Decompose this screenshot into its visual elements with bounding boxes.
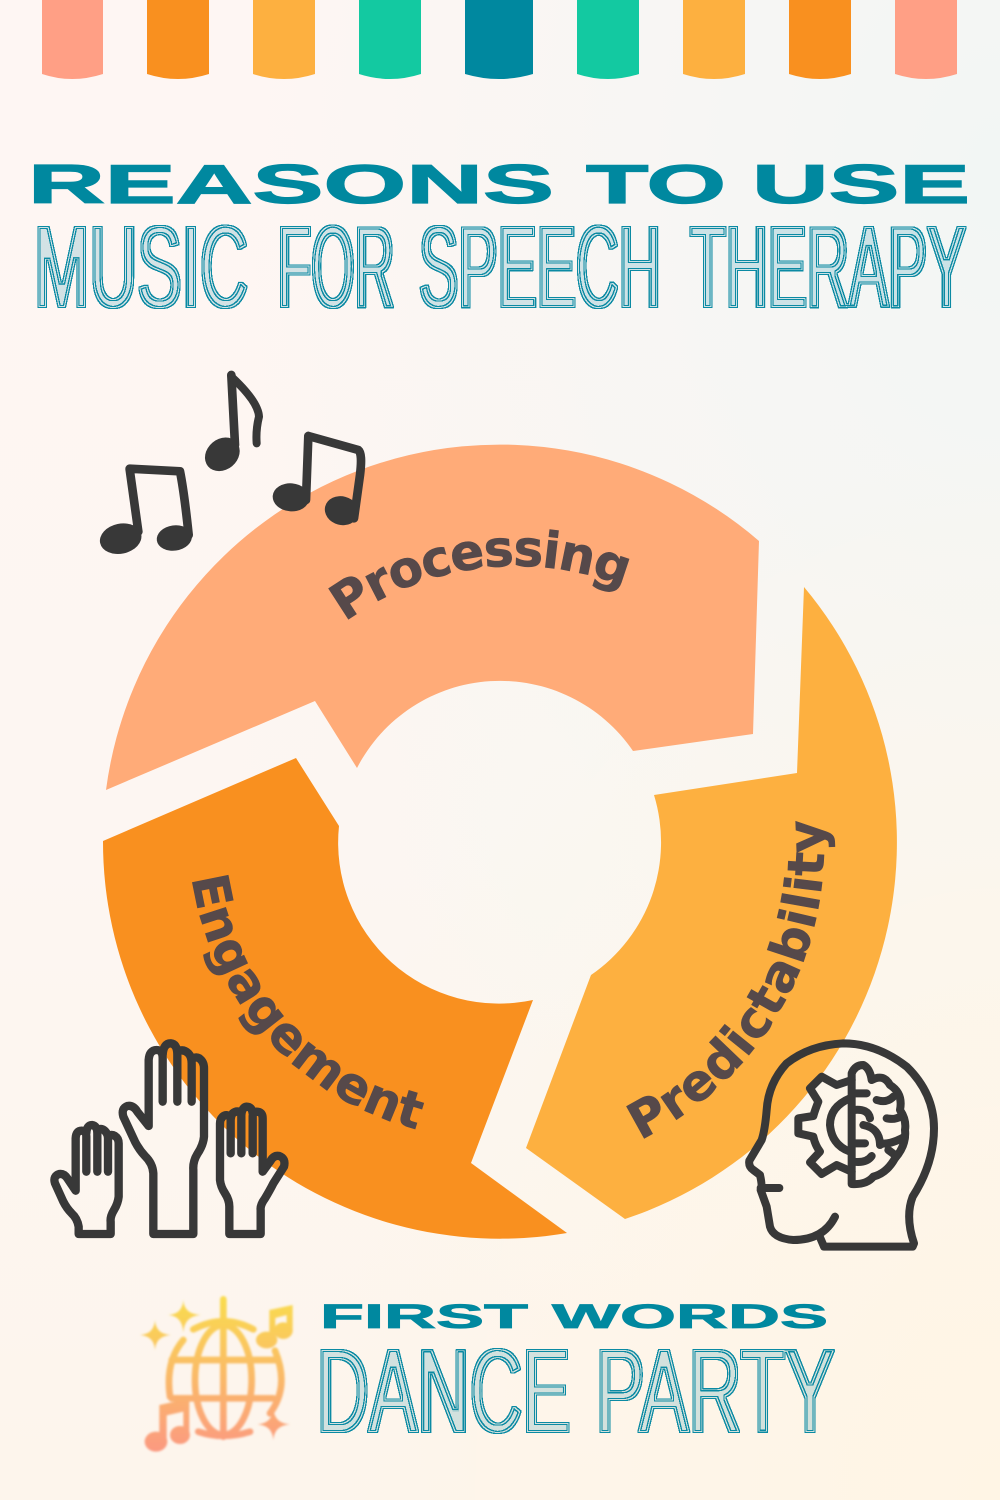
title line: reasons to use [28,153,970,215]
icon: raised hands [54,1043,284,1234]
segment: predictability [526,587,897,1219]
segment: engagement: Engagement [192,874,424,1130]
logo text: first words: WORDS [552,1298,828,1336]
title line: music for speech therapy: FOR [278,202,394,332]
logo: disco globe with notes and sparkles [140,1299,293,1452]
logo text: first words [320,1298,828,1336]
segment: processing: Processing [328,529,630,620]
cycle diagram [103,444,897,1239]
logo text: first words: FIRST [320,1298,528,1336]
logo text: dance party: DANCE [316,1325,570,1458]
segment: processing [106,444,759,790]
logo text: dance party: PARTY [596,1325,834,1458]
title line: reasons to use: REASONS [28,153,554,215]
title line: music for speech therapy: SPEECH [419,202,661,332]
banner tabs [42,0,957,79]
segment: engagement [103,758,567,1239]
title line: reasons to use: USE [752,153,970,215]
title line: reasons to use: TO [586,153,726,215]
title line: music for speech therapy: MUSIC [34,202,248,332]
segment: predictability: Predictability [626,820,836,1139]
icon: music notes [97,375,362,558]
icon: head with gear and brain [749,1043,934,1247]
title line: music for speech therapy [34,202,966,332]
